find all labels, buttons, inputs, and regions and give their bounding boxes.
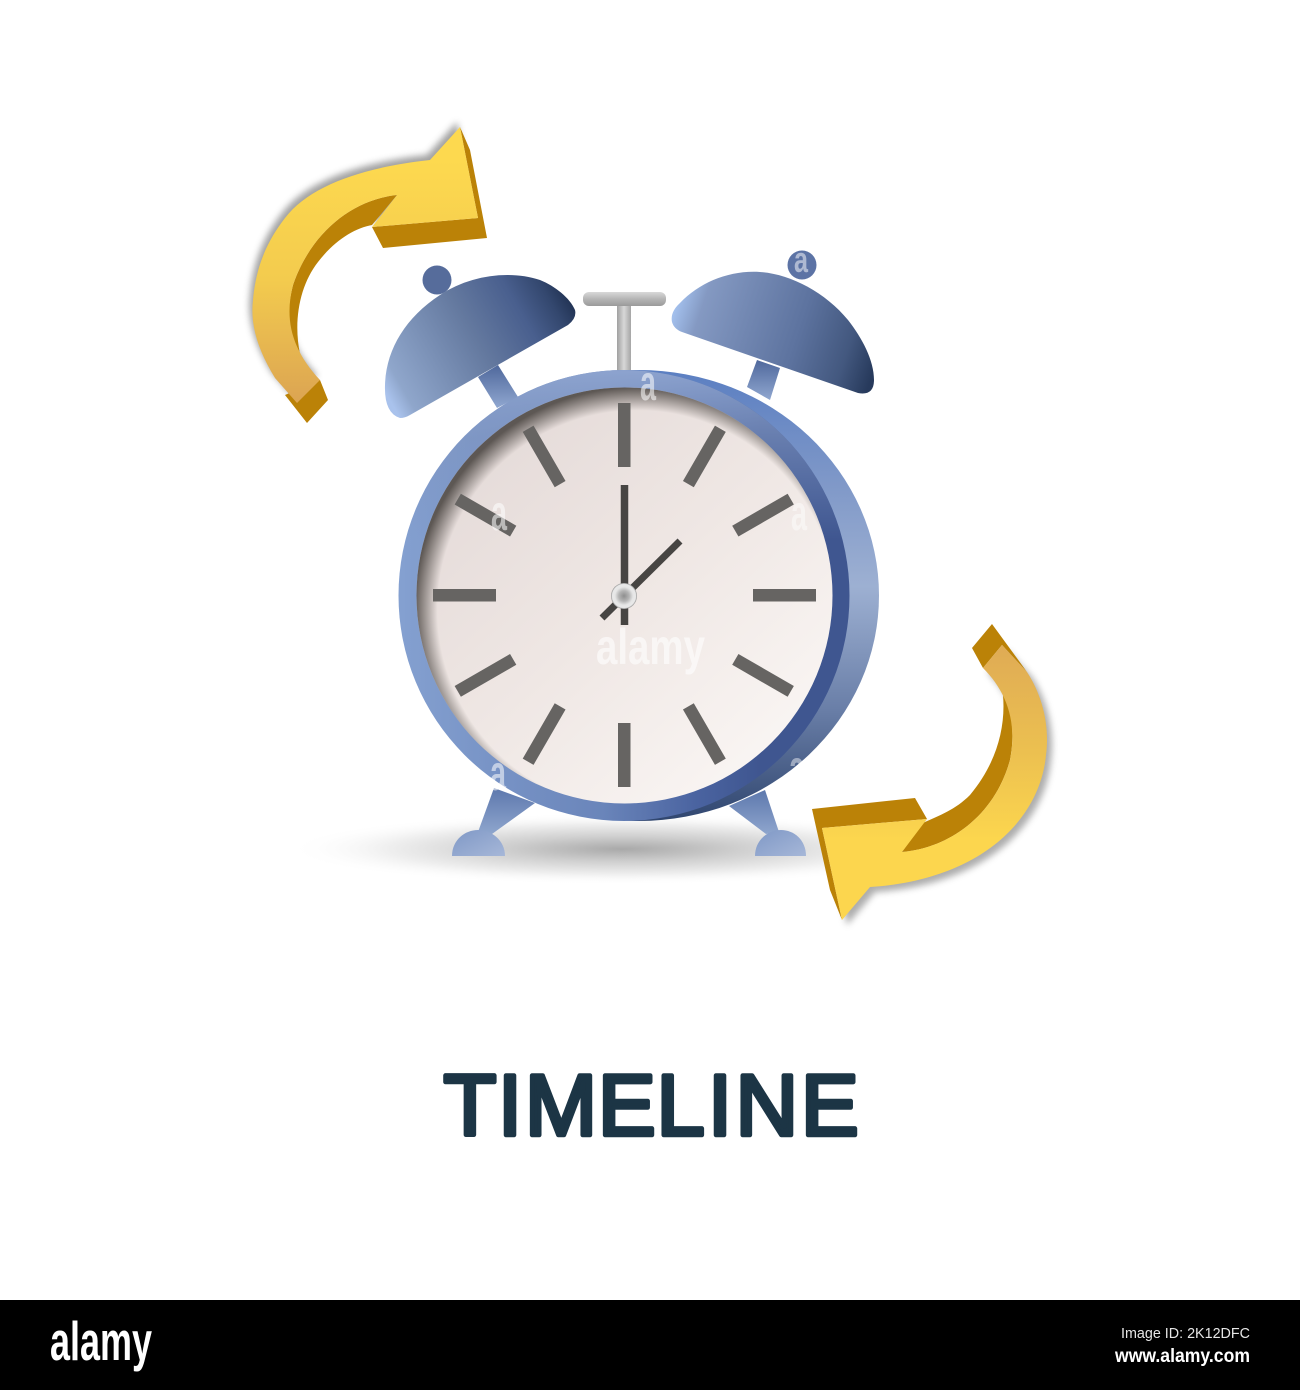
watermark marks: a bbox=[794, 239, 809, 280]
arrow: top left bbox=[249, 122, 487, 423]
title: TIMELINE bbox=[444, 1058, 859, 1154]
clock face bbox=[416, 388, 832, 804]
left foot bbox=[452, 788, 535, 856]
top handle bbox=[583, 292, 666, 372]
watermark marks: a bbox=[640, 355, 657, 411]
floor shadow bbox=[287, 813, 957, 885]
watermark marks bbox=[490, 239, 809, 801]
footer logo: alamy bbox=[50, 1310, 152, 1372]
clock hands bbox=[602, 485, 680, 625]
watermark marks: a bbox=[491, 485, 508, 541]
website: www.alamy.com bbox=[1114, 1346, 1250, 1367]
clock body bbox=[399, 370, 879, 821]
watermark marks: a bbox=[791, 485, 808, 541]
image id: Image ID: 2K12DFC bbox=[1121, 1325, 1250, 1342]
footer bar bbox=[0, 1300, 1300, 1390]
right bell bbox=[672, 250, 874, 400]
watermark marks: a bbox=[490, 745, 507, 801]
watermark marks: alamy bbox=[596, 619, 705, 675]
watermark marks: a bbox=[789, 740, 806, 796]
alarm clock bbox=[385, 250, 879, 856]
front ring bbox=[398, 370, 850, 821]
centre cap bbox=[611, 583, 637, 609]
hour ticks bbox=[433, 403, 816, 787]
arrow: bottom right bbox=[812, 624, 1052, 925]
left bell bbox=[385, 266, 575, 418]
right foot bbox=[729, 790, 806, 856]
